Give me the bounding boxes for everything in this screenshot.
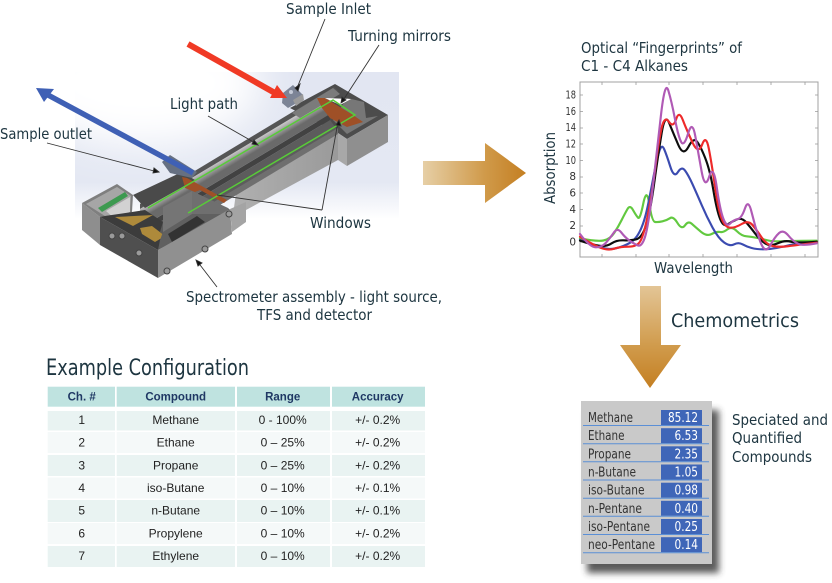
label: spectrometer assembly xyxy=(186,288,442,324)
y axis labels: 16 xyxy=(566,106,576,118)
table rows text: Propane xyxy=(153,458,199,472)
label: spectrometer assembly: TFS and detector xyxy=(256,306,373,324)
compound values: 0.14 xyxy=(674,538,698,553)
y axis labels xyxy=(566,90,576,248)
table rows text: +/- 0.1% xyxy=(355,504,401,518)
heading: example configuration: Example Configuration xyxy=(46,356,249,381)
table rows text: 0 – 10% xyxy=(261,549,305,563)
table header xyxy=(48,387,425,407)
compound names: Propane xyxy=(588,447,631,462)
compound values: 0.98 xyxy=(674,484,698,499)
beam channel bands xyxy=(140,87,340,245)
blue outlet arrow xyxy=(36,88,193,173)
windows xyxy=(182,98,363,203)
table rows text: 0 – 25% xyxy=(261,436,305,450)
label: sample outlet: Sample outlet xyxy=(0,125,92,143)
table rows text: +/- 0.2% xyxy=(355,458,401,472)
table rows text: +/- 0.2% xyxy=(355,549,401,563)
y axis title: Absorption xyxy=(541,132,559,204)
y axis labels: 18 xyxy=(566,90,576,102)
y axis labels: 0 xyxy=(569,236,576,248)
value boxes xyxy=(661,410,702,552)
compound names: Ethane xyxy=(588,429,624,444)
label: spectrometer assembly: Spectrometer assembly - light source, xyxy=(186,288,442,306)
arrow: spectra to compounds xyxy=(620,286,681,388)
compound values: 1.05 xyxy=(674,466,698,480)
device illustration xyxy=(36,41,399,278)
compound values: 2.35 xyxy=(674,447,698,462)
light tube xyxy=(140,95,330,228)
table rows text: 0 - 100% xyxy=(259,413,307,427)
chart title: Optical “Fingerprints” of xyxy=(581,39,743,57)
table rows text: Propylene xyxy=(149,526,203,540)
table rows text xyxy=(78,413,401,563)
chart title: C1 - C4 Alkanes xyxy=(581,57,688,75)
compound names: n-Pentane xyxy=(588,502,642,517)
table rows text: n-Butane xyxy=(151,504,200,518)
compound values xyxy=(668,411,698,553)
label: speciated and quantified compounds xyxy=(732,411,828,466)
beam side face xyxy=(232,131,338,222)
table rows text: 0 – 10% xyxy=(261,526,305,540)
table rows text: 5 xyxy=(78,504,85,518)
compound names: Methane xyxy=(588,411,633,426)
table rows text: 0 – 10% xyxy=(261,481,305,495)
left end box xyxy=(82,184,246,278)
absorption line chart xyxy=(566,82,818,257)
green light path xyxy=(148,100,355,213)
sample inlet fitting xyxy=(282,85,304,108)
right end box xyxy=(290,84,388,166)
device backdrop xyxy=(75,72,399,208)
arrow: device to spectra xyxy=(423,143,526,203)
table rows text: +/- 0.2% xyxy=(355,436,401,450)
compound names: neo-Pentane xyxy=(588,538,655,553)
table rows text: Ethane xyxy=(157,436,195,450)
y axis labels: 12 xyxy=(566,138,576,150)
red inlet arrow xyxy=(188,44,287,98)
table header: Accuracy xyxy=(352,392,404,404)
table rows text: Ethylene xyxy=(152,549,199,563)
table rows text: 3 xyxy=(78,458,85,472)
y axis labels: 10 xyxy=(566,155,576,167)
label: speciated and quantified compounds: Compounds xyxy=(732,448,812,466)
label: sample inlet: Sample Inlet xyxy=(286,0,371,18)
compound values: 0.25 xyxy=(674,520,698,535)
y axis labels: 6 xyxy=(569,188,576,200)
label: windows: Windows xyxy=(310,214,371,232)
sample outlet fitting xyxy=(162,155,197,178)
table rows text: iso-Butane xyxy=(147,481,205,495)
compound names: iso-Pentane xyxy=(588,520,650,535)
configuration table xyxy=(48,387,425,567)
table rows text: +/- 0.2% xyxy=(355,413,401,427)
table rows text: +/- 0.1% xyxy=(355,481,401,495)
label: light path: Light path xyxy=(170,95,238,113)
table rows text: 1 xyxy=(78,413,85,427)
turning mirror xyxy=(325,98,351,105)
table rows text: 6 xyxy=(78,526,85,540)
compound names xyxy=(588,411,655,553)
table rows text: 7 xyxy=(78,549,85,563)
compound values: 6.53 xyxy=(674,429,698,444)
spectra curves xyxy=(580,88,817,249)
y axis labels: 14 xyxy=(566,122,576,134)
callout lines xyxy=(47,19,379,287)
table rows text: Methane xyxy=(152,413,199,427)
compound values: 0.40 xyxy=(674,502,698,517)
y axis labels: 4 xyxy=(569,204,576,216)
label: speciated and quantified compounds: Quantified xyxy=(732,429,802,447)
compound names: iso-Butane xyxy=(588,484,645,499)
table header: Range xyxy=(265,392,300,404)
left rear wall xyxy=(133,172,195,208)
table rows text: 2 xyxy=(78,436,85,450)
table rows text: 0 – 25% xyxy=(261,458,305,472)
y axis labels: 8 xyxy=(569,171,576,183)
label: turning mirrors: Turning mirrors xyxy=(347,27,451,45)
table rows text: +/- 0.2% xyxy=(355,526,401,540)
chart title xyxy=(581,39,743,75)
table rows text: 4 xyxy=(78,481,85,495)
table rows text: 0 – 10% xyxy=(261,504,305,518)
y axis labels: 2 xyxy=(569,220,576,232)
table header: Compound xyxy=(145,392,206,404)
compound names: n-Butane xyxy=(588,466,636,480)
x axis title: Wavelength xyxy=(654,259,733,277)
table row backgrounds xyxy=(48,411,425,567)
label: chemometrics: Chemometrics xyxy=(671,310,799,332)
results panel xyxy=(581,401,719,573)
table header: Ch. # xyxy=(68,392,96,404)
compound values: 85.12 xyxy=(668,411,698,426)
